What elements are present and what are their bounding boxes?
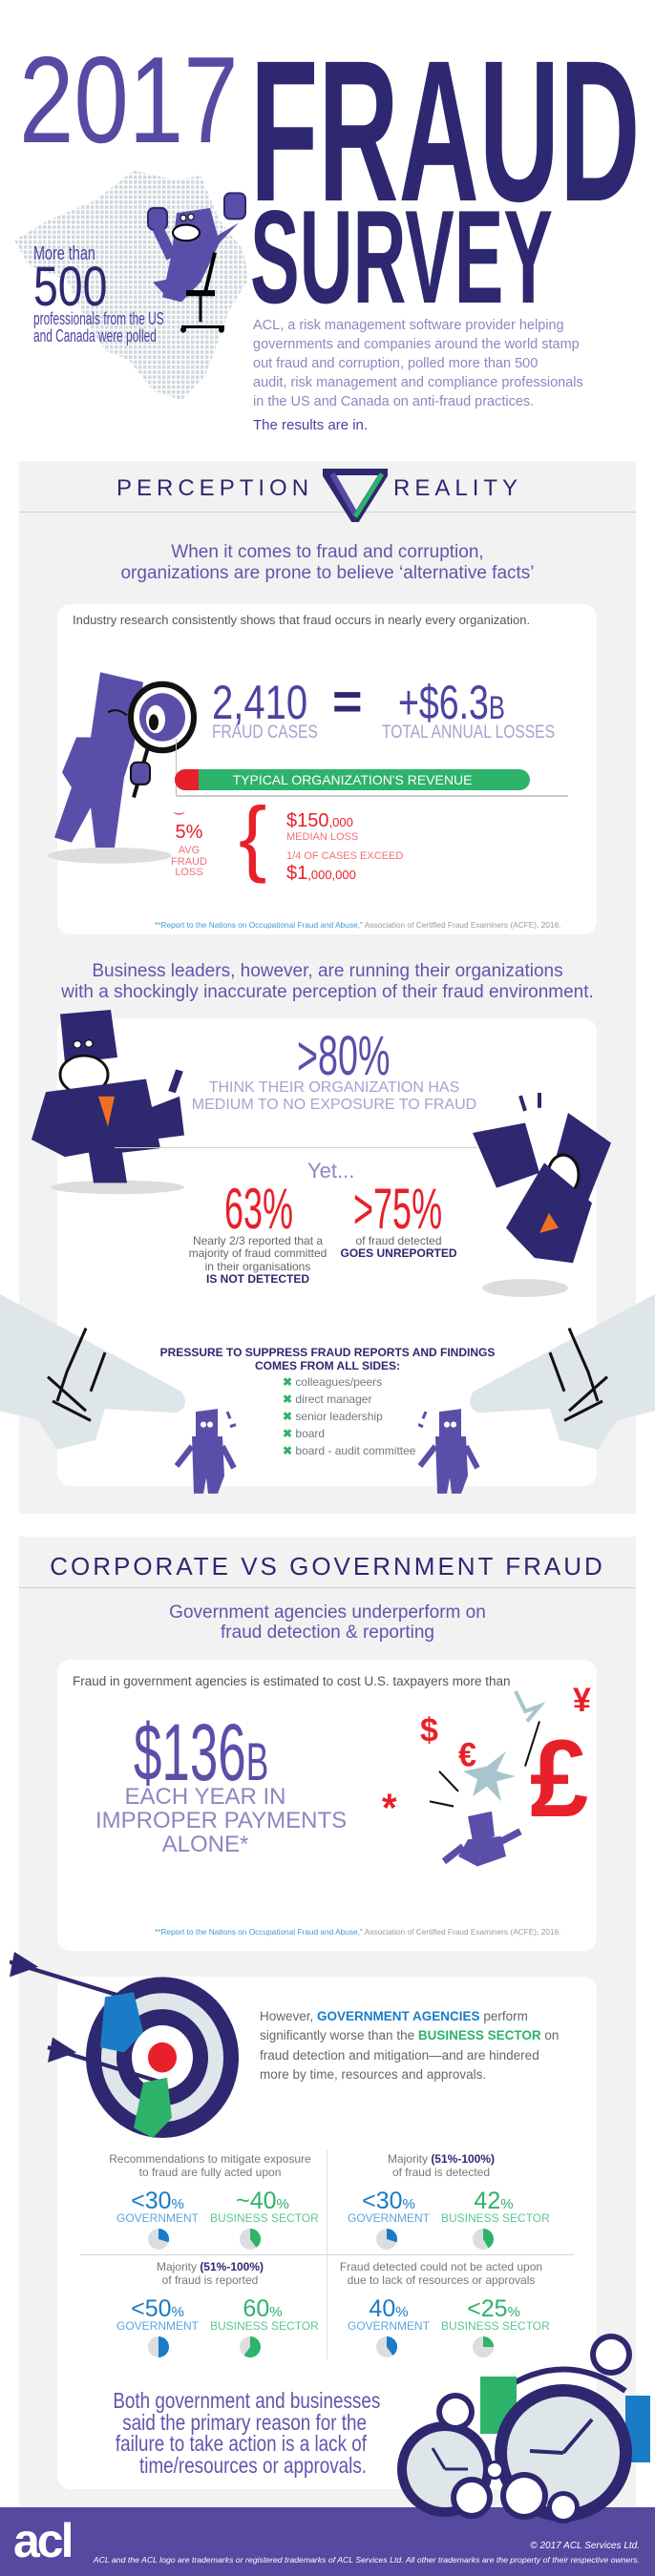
- title: FRAUD: FRAUD: [250, 18, 640, 243]
- pie charts: [148, 2229, 494, 2357]
- stat: $136B: IMPROPER PAYMENTS: [95, 1808, 347, 1833]
- stat block: could not be acted upon: [340, 2260, 550, 2333]
- stat block: fraud reported: Majority (51%-100%): [157, 2260, 264, 2273]
- copyright: © 2017 ACL Services Ltd.: [530, 2541, 640, 2551]
- text: however government agencies: more by time, resources and approvals.: [260, 2067, 486, 2082]
- stat: 2,410 fraud cases: 2,410: [212, 676, 307, 729]
- stat block: recommendations acted upon: to fraud are fully acted upon: [139, 2165, 281, 2178]
- stat: total annual losses: [382, 676, 555, 743]
- stat: 63% not detected: [189, 1177, 327, 1286]
- card: fraud statistics: [57, 604, 597, 934]
- stat: 5% avg fraud loss: ⏝: [174, 801, 185, 814]
- stat block: fraud reported: 60%: [243, 2295, 283, 2322]
- stat: $136B: $136B: [134, 1707, 268, 1797]
- character: cheering man on chair: [147, 192, 246, 333]
- illustration: currency symbols hitting man: $: [420, 1711, 438, 1749]
- text: equals: =: [332, 673, 363, 730]
- card: improper payments: [57, 1660, 597, 1951]
- intro paragraph: out fraud and corruption, polled more than 500: [253, 356, 538, 371]
- list: pressure sources: ✖ board - audit committee: [283, 1444, 415, 1457]
- illustration: pointing hand left: [0, 1294, 185, 1450]
- stat: 5% avg fraud loss: LOSS: [175, 867, 203, 878]
- text: however government agencies: fraud detection and mitigation—and are hindered: [260, 2048, 539, 2063]
- stat: total annual losses: TOTAL ANNUAL LOSSES: [382, 723, 555, 743]
- stat: >75% unreported: of fraud detected: [355, 1234, 442, 1247]
- stat: 63% not detected: 63%: [224, 1177, 293, 1241]
- stat block: fraud reported: <50%: [131, 2295, 184, 2322]
- illustration: sad figure left: [175, 1409, 237, 1494]
- illustration: alarm clocks: [397, 2334, 650, 2524]
- stat block: recommendations acted upon: [109, 2152, 319, 2225]
- title: SURVEY: SURVEY: [250, 183, 553, 331]
- illustration: sad figure right: [418, 1409, 480, 1494]
- stat: 5% avg fraud loss: AVG: [179, 845, 200, 856]
- panel: perception vs reality: [19, 461, 636, 1514]
- stat block: recommendations acted upon: Recommendations to mitigate exposure: [109, 2152, 311, 2166]
- heading: corporate vs government fraud: CORPORATE VS GOVERNMENT FRAUD: [50, 1552, 605, 1581]
- stat block: recommendations acted upon: BUSINESS SECTOR: [210, 2211, 319, 2225]
- bar: typical organization's revenue: [175, 769, 530, 790]
- intro paragraph: ACL, a risk management software provider helping: [253, 318, 564, 333]
- intro paragraph: audit, risk management and compliance professionals: [253, 375, 583, 390]
- stat: median loss: $1,000,000: [286, 863, 356, 884]
- footnote: **Report to the Nations on Occupational Fraud and Abuse," Association of Certified Fraud Examiners (ACFE), 2016.: [155, 1927, 560, 1937]
- map of north america (dotted): [14, 170, 246, 399]
- heading: reality: REALITY: [393, 475, 522, 501]
- conclusion text: said the primary reason for the: [122, 2409, 367, 2434]
- stat block: could not be acted upon: <25%: [467, 2295, 520, 2322]
- text: industry research: Industry research consistently shows that fraud occurs in nearly every organization.: [73, 613, 530, 627]
- stat block: recommendations acted upon: <30%: [131, 2188, 184, 2214]
- callout: more than 500 professionals: 500: [33, 256, 107, 318]
- icon: brace: {: [239, 789, 266, 884]
- subheading: government agencies underperform: fraud detection & reporting: [221, 1623, 434, 1643]
- illustration: currency symbols hitting man: ¥: [573, 1681, 592, 1719]
- text: pressure to suppress: COMES FROM ALL SIDES:: [255, 1359, 400, 1372]
- stat block: fraud detected: of fraud is detected: [392, 2165, 490, 2178]
- stat block: fraud detected: <30%: [362, 2188, 415, 2214]
- text: fraud in government: Fraud in government agencies is estimated to cost U.S. taxpayers more than: [73, 1674, 510, 1688]
- stat: 63% not detected: in their organisations: [205, 1260, 310, 1273]
- stat block: could not be acted upon: Fraud detected could not be acted upon: [340, 2260, 542, 2273]
- stat: >80%: >80%: [297, 1025, 390, 1087]
- list: pressure sources: ✖ direct manager: [283, 1393, 371, 1406]
- callout: more than 500 professionals: [33, 243, 164, 346]
- stat block: fraud reported: of fraud is reported: [162, 2273, 258, 2287]
- text: yet: Yet...: [307, 1159, 354, 1183]
- stat: median loss: 1/4 OF CASES EXCEED: [286, 850, 403, 862]
- footnote: **Report to the Nations on Occupational Fraud and Abuse," Association of Certified Fraud Examiners (ACFE), 2016.: [155, 920, 560, 930]
- list: pressure sources: ✖ board: [283, 1427, 325, 1440]
- subheading: government agencies underperform: Government agencies underperform on: [169, 1602, 486, 1623]
- card: perception stats: [57, 1018, 597, 1486]
- stat block: fraud reported: BUSINESS SECTOR: [210, 2319, 319, 2333]
- subheading: business leaders: [61, 961, 594, 1002]
- conclusion text: failure to take action is a lack of: [116, 2431, 367, 2456]
- list: pressure sources: ✖ senior leadership: [283, 1410, 383, 1423]
- icon: penrose triangle: [323, 469, 388, 522]
- text: pressure to suppress: [160, 1346, 495, 1372]
- text: however government agencies: [260, 2009, 559, 2082]
- stat: 5% avg fraud loss: [171, 801, 207, 878]
- stat: $136B: [95, 1707, 347, 1857]
- stat block: could not be acted upon: due to lack of resources or approvals: [348, 2273, 535, 2287]
- text: however government agencies: significantly worse than the BUSINESS SECTOR on: [260, 2028, 559, 2042]
- list: pressure sources: [283, 1375, 415, 1457]
- subheading: business leaders: Business leaders, however, are running their organizations: [92, 961, 563, 981]
- stat: 63% not detected: Nearly 2/3 reported that a: [193, 1234, 323, 1247]
- stat: $136B: ALONE*: [162, 1832, 248, 1857]
- text: pressure to suppress: PRESSURE TO SUPPRESS FRAUD REPORTS AND FINDINGS: [160, 1346, 495, 1359]
- text: however government agencies: However, GOVERNMENT AGENCIES perform: [260, 2009, 528, 2023]
- stat: median loss: [286, 810, 403, 884]
- trademark notice: ACL and the ACL logo are trademarks or registered trademarks of ACL Services Ltd. All other trademarks are the property of their respective owners.: [94, 2555, 640, 2565]
- intro paragraph: [253, 318, 583, 409]
- stat: >80%: [192, 1025, 476, 1113]
- logo: acl: acl: [13, 2514, 72, 2567]
- stat: 63% not detected: IS NOT DETECTED: [206, 1272, 309, 1286]
- subheading: alternative facts: When it comes to fraud and corruption,: [171, 542, 484, 562]
- stat block: recommendations acted upon: ~40%: [236, 2188, 289, 2214]
- stat block: fraud detected: BUSINESS SECTOR: [441, 2211, 550, 2225]
- conclusion text: Both government and businesses: [113, 2388, 380, 2413]
- conclusion text: time/resources or approvals.: [139, 2453, 367, 2478]
- intro paragraph: in the US and Canada on anti-fraud practices.: [253, 394, 534, 409]
- text: the results are in: The results are in.: [253, 417, 368, 433]
- illustration: currency symbols hitting man: *: [382, 1785, 397, 1831]
- subheading: government agencies underperform: [169, 1602, 486, 1643]
- stat: 63% not detected: majority of fraud committed: [189, 1246, 327, 1260]
- callout: more than 500 professionals: and Canada were polled: [33, 326, 157, 346]
- intro paragraph: governments and companies around the world stamp: [253, 337, 580, 352]
- stat block: could not be acted upon: BUSINESS SECTOR: [441, 2319, 550, 2333]
- stat block: could not be acted upon: GOVERNMENT: [348, 2319, 430, 2333]
- stat: >75% unreported: GOES UNREPORTED: [340, 1246, 456, 1260]
- stat: median loss: $150,000: [286, 810, 353, 831]
- stat: >75% unreported: >75%: [353, 1177, 442, 1241]
- illustration: man with magnifying glass: [48, 672, 197, 864]
- stat block: fraud detected: GOVERNMENT: [348, 2211, 430, 2225]
- conclusion text: [113, 2388, 380, 2478]
- stat block: fraud reported: GOVERNMENT: [116, 2319, 199, 2333]
- bar: typical organization's revenue: TYPICAL ORGANIZATION'S REVENUE: [233, 772, 472, 787]
- stat: total annual losses: +$6.3B: [398, 676, 505, 729]
- card: government vs business comparison: [57, 1977, 597, 2489]
- illustration: businessman thumbs up: [32, 1010, 184, 1194]
- stat block: fraud detected: Majority (51%-100%): [388, 2152, 495, 2166]
- illustration: target with arrows: [10, 1952, 239, 2138]
- illustration: currency symbols hitting man: £: [530, 1717, 588, 1840]
- stat block: could not be acted upon: 40%: [369, 2295, 409, 2322]
- stat block: fraud detected: [348, 2152, 550, 2225]
- stat: >80%: THINK THEIR ORGANIZATION HAS: [209, 1079, 459, 1096]
- callout: more than 500 professionals: More than: [33, 243, 95, 264]
- stat block: fraud reported: [116, 2260, 319, 2333]
- illustration: currency symbols hitting man: [382, 1681, 592, 1867]
- stat: 5% avg fraud loss: FRAUD: [171, 855, 207, 867]
- stat: 2,410 fraud cases: FRAUD CASES: [212, 723, 318, 743]
- stat: >80%: MEDIUM TO NO EXPOSURE TO FRAUD: [192, 1097, 476, 1113]
- stat block: recommendations acted upon: GOVERNMENT: [116, 2211, 199, 2225]
- callout: more than 500 professionals: professionals from the US: [33, 309, 164, 328]
- panel: corporate vs government: [19, 1537, 636, 2507]
- heading: perception: PERCEPTION: [116, 475, 313, 501]
- illustration: falling man: [473, 1093, 611, 1297]
- subheading: business leaders: with a shockingly inaccurate perception of their fraud environment.: [61, 982, 594, 1002]
- illustration: currency symbols hitting man: €: [458, 1736, 476, 1774]
- footer band: [0, 2507, 655, 2576]
- subheading: alternative facts: [120, 542, 535, 583]
- stat block: fraud detected: 42%: [474, 2188, 514, 2214]
- subheading: alternative facts: organizations are prone to believe ‘alternative facts’: [120, 563, 535, 583]
- stat: $136B: EACH YEAR IN: [125, 1784, 285, 1810]
- stat: >75% unreported: [340, 1177, 456, 1260]
- list: pressure sources: ✖ colleagues/peers: [283, 1375, 382, 1389]
- stat: 5% avg fraud loss: 5%: [176, 822, 202, 843]
- title: 2017: 2017: [19, 31, 239, 169]
- stat: median loss: MEDIAN LOSS: [286, 831, 358, 843]
- illustration: pointing hand right: [470, 1294, 655, 1450]
